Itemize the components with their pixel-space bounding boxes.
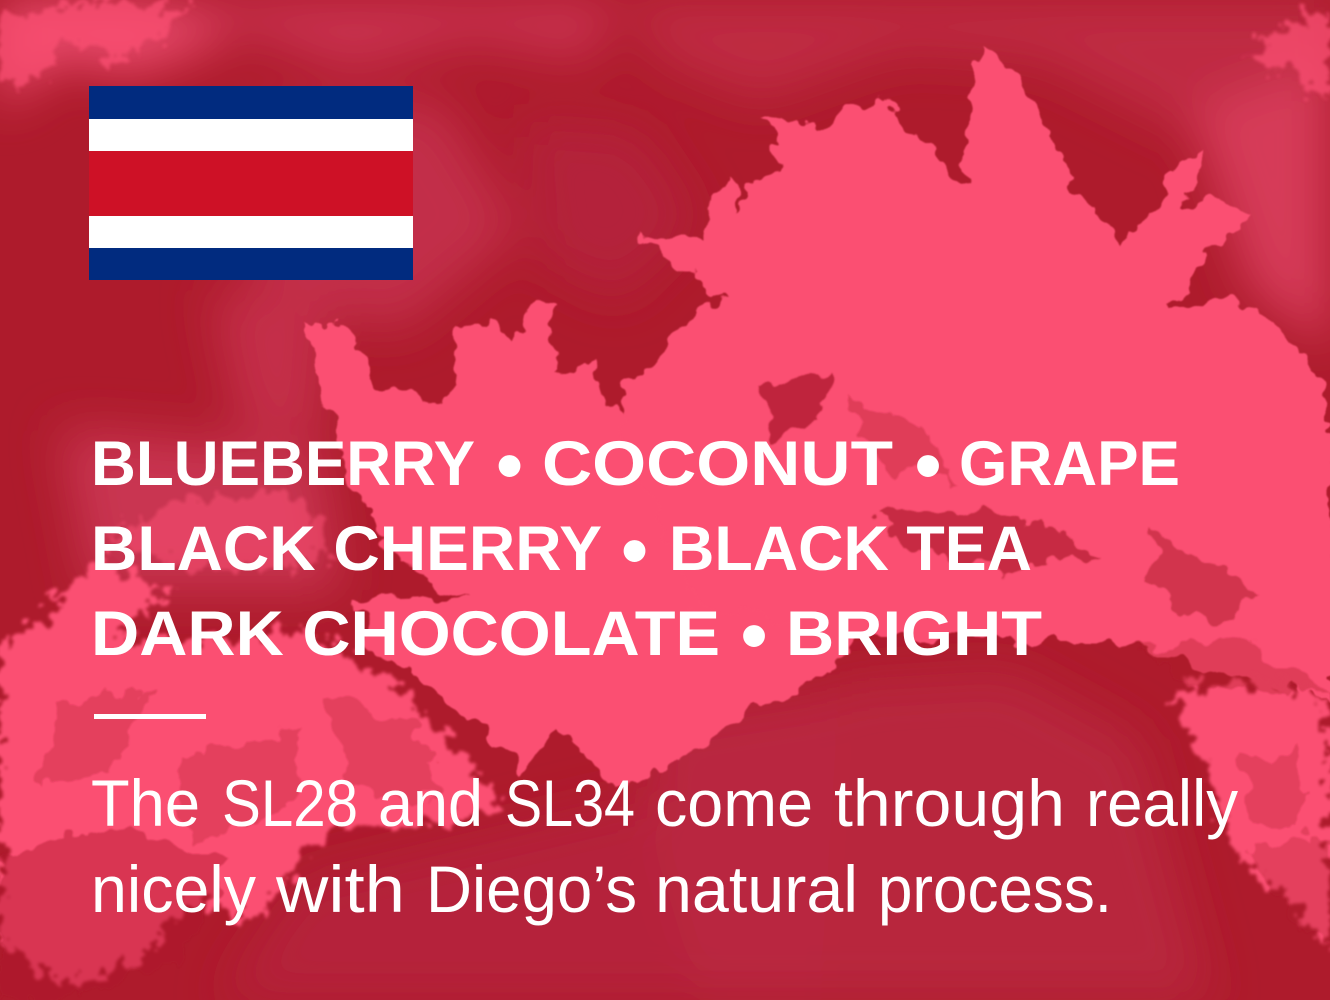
flower cluster left [0,490,500,985]
heading: flavour notes: BLUEBERRY [91,429,475,499]
body text: description: come [655,766,813,840]
divider rule [94,714,206,719]
body text: description: and [378,766,483,840]
heading: flavour notes: COCONUT [542,429,893,499]
body text: description: nicely [91,852,256,926]
body text: description: Diego’s [426,852,637,926]
flower cluster centre [305,300,860,790]
large flower top right [600,40,1330,700]
body text: description: through [834,766,1065,840]
body text: description: SL28 [222,766,358,840]
heading: flavour notes [91,423,1180,678]
body text: description: really [1086,766,1238,840]
body text: description: natural [655,852,858,926]
body text: description: process. [878,852,1112,926]
body text: description: SL34 [505,766,635,840]
heading: flavour notes: BLACK TEA [669,514,1032,584]
heading: flavour notes: • [915,423,941,508]
body text: description [91,766,1238,926]
body text: description: with [275,852,405,926]
background: top corner sprigs [0,0,1330,100]
background: dark gaps in flowers [0,375,1330,1000]
heading: flavour notes: • [621,508,648,593]
heading: flavour notes: • [741,593,767,678]
body text: description: The [91,766,200,840]
heading: flavour notes: DARK CHOCOLATE [91,599,720,669]
flag: Costa Rica [89,86,413,280]
right-bottom petals [1170,680,1330,950]
heading: flavour notes: BRIGHT [786,599,1042,669]
heading: flavour notes: BLACK CHERRY [91,514,602,584]
heading: flavour notes: GRAPE [959,429,1180,499]
heading: flavour notes: • [496,423,523,508]
